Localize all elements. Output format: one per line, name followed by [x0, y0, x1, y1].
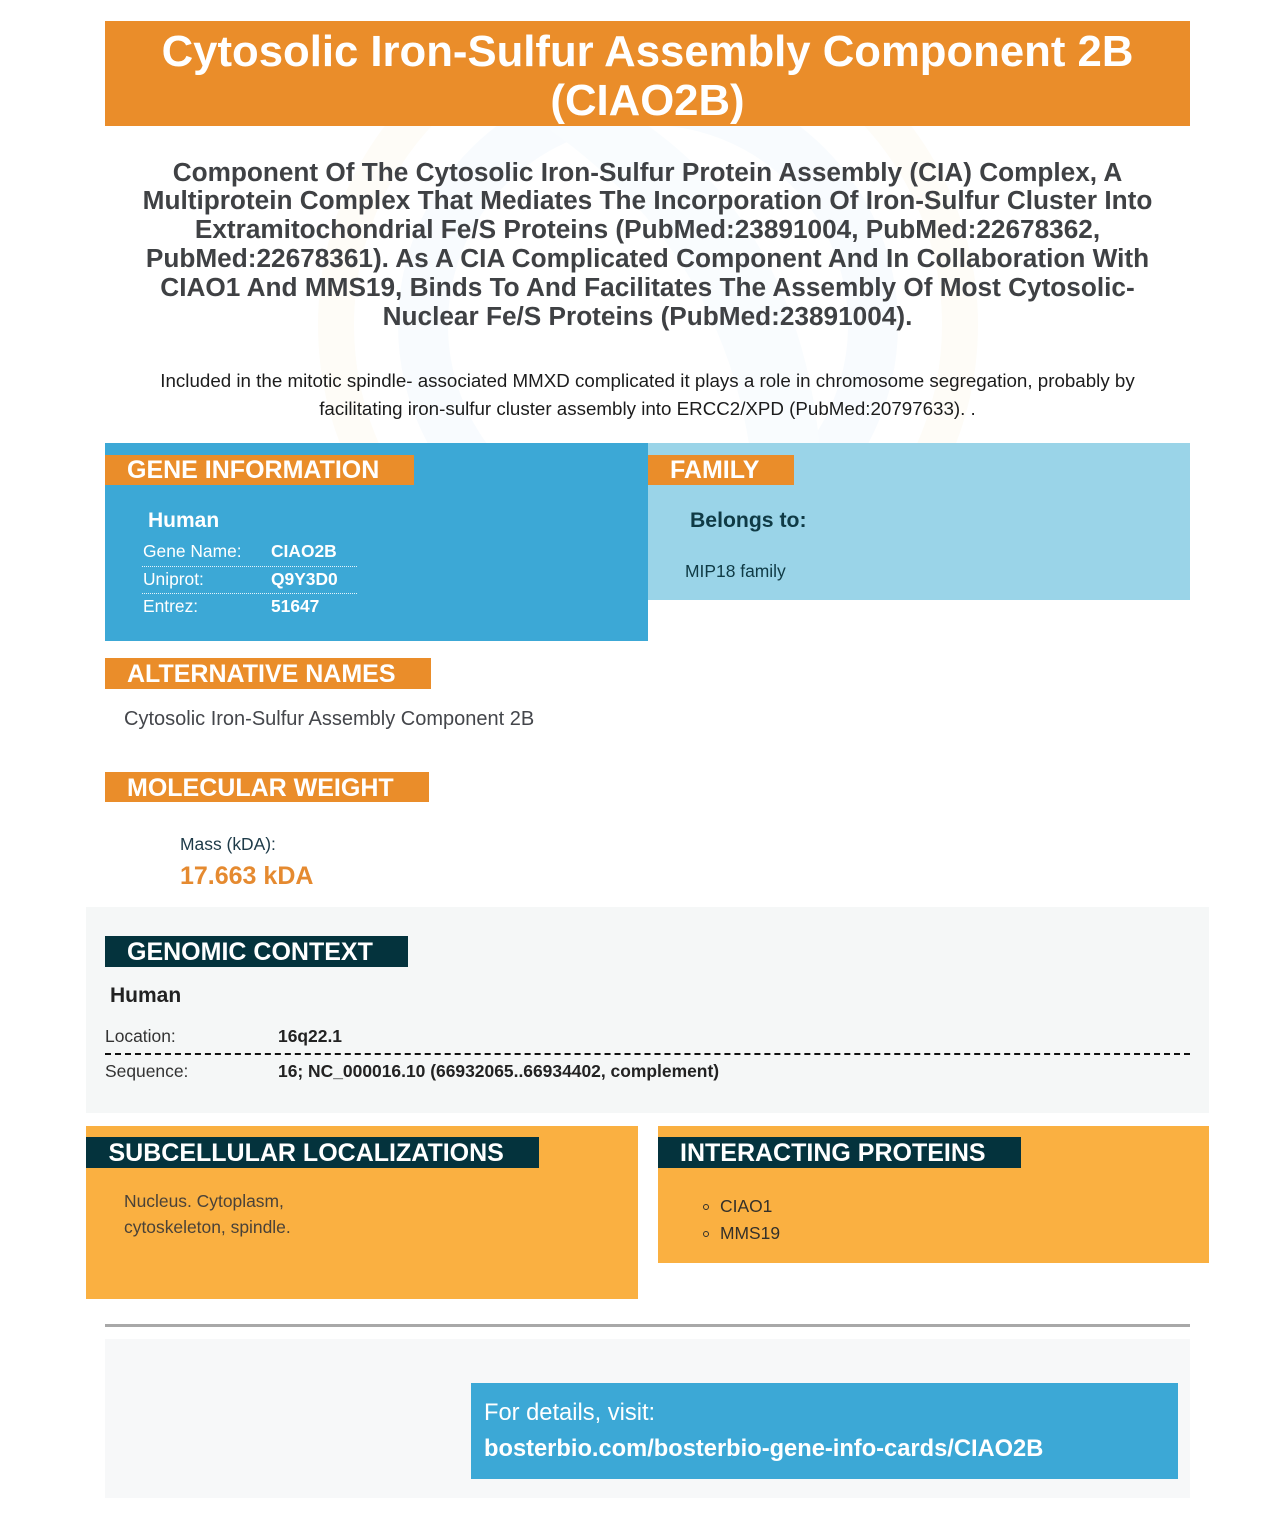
gene info table: Q9Y3D0 [271, 569, 338, 589]
location row [105, 1026, 342, 1046]
subtitle description: PubMed:22678361). As A CIA Complicated Component And In Collaboration With [146, 243, 1149, 273]
subtitle description: Nuclear Fe/S Proteins (PubMed:23891004). [383, 301, 912, 331]
mass value: 17.663 kDA [180, 862, 313, 890]
species label: Human [110, 984, 181, 1007]
gene info table: CIAO2B [271, 541, 337, 561]
subtitle description: Multiprotein Complex That Mediates The Incorporation Of Iron-Sulfur Cluster Into [143, 185, 1152, 215]
gene info table: 51647 [271, 596, 319, 616]
location row: Location: [105, 1026, 176, 1046]
protein list: CIAO1 [720, 1196, 772, 1216]
background watermark [300, 110, 1000, 450]
mass label: Mass (kDA): [180, 834, 276, 854]
description paragraph [160, 370, 1135, 419]
callout: details link: bosterbio.com/bosterbio-gene-info-cards/CIAO2B [484, 1436, 1043, 1462]
description paragraph: Included in the mitotic spindle- associated MMXD complicated it plays a role in chromosome segregation, probably by [160, 370, 1135, 391]
title banner [105, 21, 1190, 126]
heading: family: FAMILY [670, 456, 759, 484]
gene info table: Entrez: [143, 596, 198, 616]
heading: genomic context: GENOMIC CONTEXT [127, 938, 373, 966]
subtitle description: CIAO1 And MMS19, Binds To And Facilitates The Assembly Of Most Cytosolic- [160, 272, 1135, 302]
heading: subcellular localizations: SUBCELLULAR LOCALIZATIONS [108, 1139, 504, 1167]
panel: genomic context [86, 907, 1209, 1113]
protein list: MMS19 [720, 1223, 780, 1243]
gene info table: Gene Name: [143, 541, 242, 561]
panel: family [648, 443, 1190, 600]
panel: gene information [105, 443, 648, 641]
belongs to label: Belongs to: [690, 509, 807, 532]
panel: interacting proteins [658, 1126, 1209, 1263]
localization text [124, 1191, 291, 1237]
family value: MIP18 family [685, 561, 786, 581]
heading: alternative names: ALTERNATIVE NAMES [127, 660, 396, 688]
callout: details link [471, 1383, 1178, 1479]
heading: family [648, 455, 794, 485]
gene info table [142, 541, 357, 616]
sequence row: Sequence: [105, 1061, 188, 1081]
panel: subcellular localizations [86, 1126, 638, 1299]
location row: 16q22.1 [278, 1026, 342, 1046]
sequence row: 16; NC_000016.10 (66932065..66934402, complement) [278, 1061, 719, 1081]
gene info table: Uniprot: [143, 569, 204, 589]
localization text: Nucleus. Cytoplasm, [124, 1191, 284, 1211]
alternative names text: Cytosolic Iron-Sulfur Assembly Component 2B [124, 708, 534, 730]
description paragraph: facilitating iron-sulfur cluster assembly into ERCC2/XPD (PubMed:20797633). . [319, 398, 976, 419]
title banner: (CIAO2B) [550, 76, 745, 125]
subtitle description: Component Of The Cytosolic Iron-Sulfur Protein Assembly (CIA) Complex, A [173, 157, 1122, 187]
heading: molecular weight: MOLECULAR WEIGHT [127, 774, 394, 802]
subtitle description [143, 157, 1152, 331]
localization text: cytoskeleton, spindle. [124, 1217, 291, 1237]
protein list [703, 1196, 780, 1243]
panel: footer [105, 1339, 1190, 1498]
title banner: Cytosolic Iron-Sulfur Assembly Component 2B [162, 27, 1133, 76]
subtitle description: Extramitochondrial Fe/S Proteins (PubMed:23891004, PubMed:22678362, [195, 214, 1100, 244]
callout: details link: For details, visit: [484, 1400, 655, 1426]
species label: Human [148, 509, 219, 532]
heading: interacting proteins: INTERACTING PROTEINS [680, 1139, 986, 1167]
heading: gene information: GENE INFORMATION [127, 456, 379, 484]
